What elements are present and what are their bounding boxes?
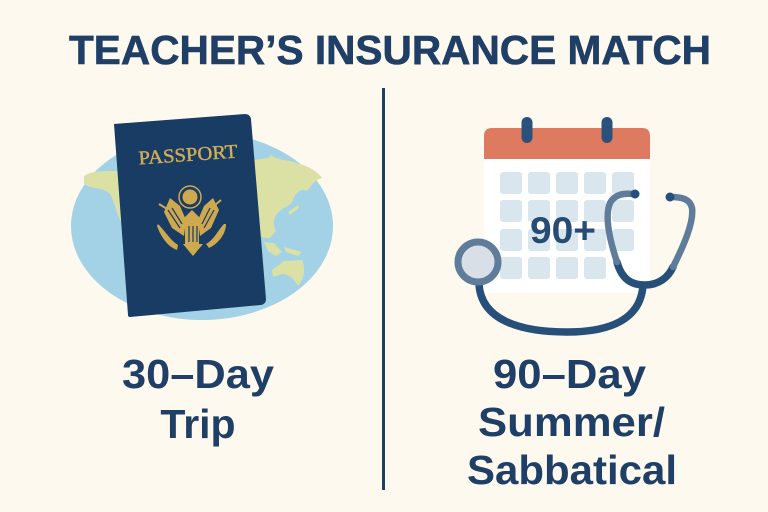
calendar number: 90+ xyxy=(530,210,596,251)
icon: passport xyxy=(114,114,266,317)
landmass: southeast asia xyxy=(264,242,302,256)
passport label: PASSPORT xyxy=(138,142,238,169)
icon: stethoscope xyxy=(458,190,692,332)
earpiece tips xyxy=(630,190,674,202)
calendar header xyxy=(484,128,650,159)
label: 90-day summer/sabbatical: 90–Day xyxy=(493,351,646,397)
label: 90-day summer/sabbatical xyxy=(467,351,677,493)
landmass: australia xyxy=(272,260,304,286)
label: 90-day summer/sabbatical: Summer/ xyxy=(478,399,665,445)
icon: globe xyxy=(71,132,333,320)
y-branch xyxy=(617,262,673,285)
chestpiece xyxy=(458,242,498,282)
label: 90-day summer/sabbatical: Sabbatical xyxy=(467,447,677,493)
center divider xyxy=(382,88,385,490)
label: 30-day trip: Trip xyxy=(160,401,236,447)
icon: calendar xyxy=(484,117,650,293)
landmass: asia xyxy=(254,155,322,238)
label: 30-day trip: 30–Day xyxy=(122,351,274,397)
calendar rings xyxy=(522,117,612,143)
landmass: japan strip xyxy=(288,205,299,215)
landmass: americas xyxy=(84,171,123,224)
passport emblem xyxy=(157,186,226,256)
main tube xyxy=(479,284,643,332)
calendar day cells xyxy=(500,172,634,279)
left earpiece tube xyxy=(608,194,634,262)
title: TEACHER’S INSURANCE MATCH xyxy=(69,27,711,73)
right earpiece tube xyxy=(671,197,692,267)
label: 30-day trip xyxy=(122,351,274,447)
